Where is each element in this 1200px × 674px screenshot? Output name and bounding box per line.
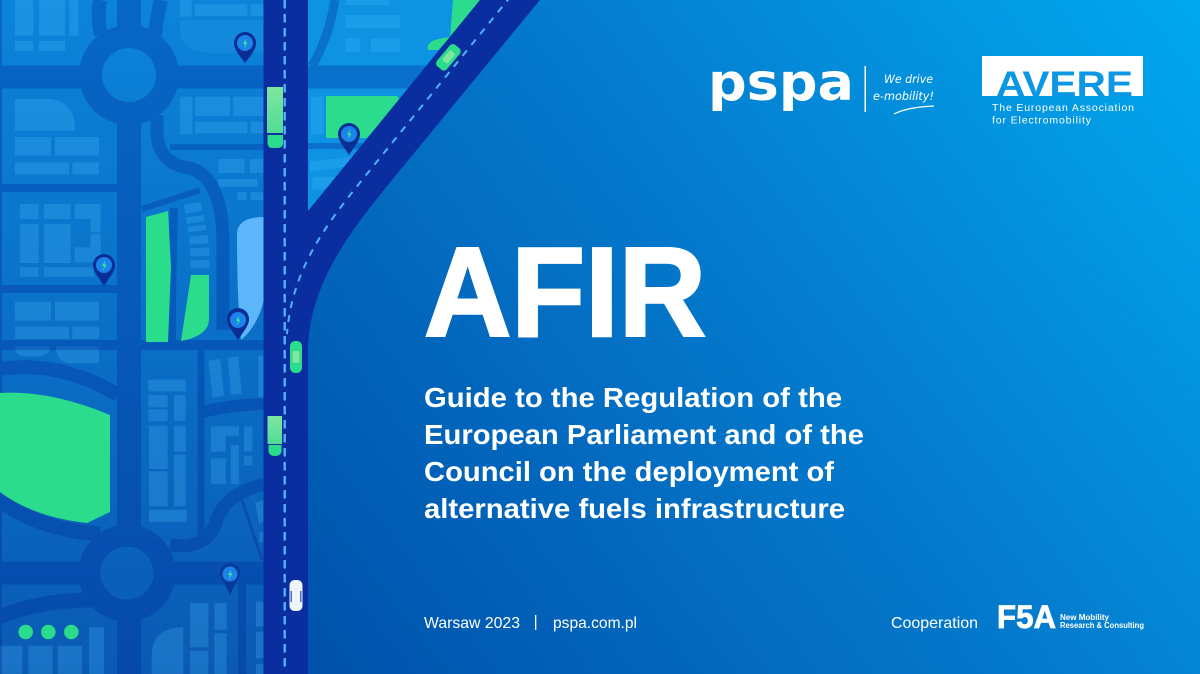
footer: cooperation: Cooperation	[891, 615, 978, 632]
logo: F5A: Research & Consulting	[1060, 621, 1144, 630]
logo: AVERE	[982, 56, 1143, 126]
subtitle: European Parliament and of the	[424, 419, 864, 450]
logo: F5A: New Mobility	[1060, 613, 1110, 622]
subtitle: Guide to the Regulation of the	[424, 382, 842, 413]
icon: charging pin 5	[220, 563, 240, 595]
footer: place and website	[424, 615, 637, 632]
subtitle	[424, 382, 864, 524]
icon: charging pin 2	[338, 123, 360, 155]
road: diagonal branch	[308, 0, 544, 345]
map buildings	[0, 0, 400, 674]
logo: PSPA	[708, 53, 934, 114]
icon: charging pin 1	[234, 32, 256, 63]
logo: PSPA: e-mobility!	[873, 89, 934, 103]
subtitle: Council on the deployment of	[424, 456, 835, 487]
logo: PSPA: pspa	[708, 53, 854, 113]
road: main vertical	[264, 0, 308, 674]
logo: AVERE: The European Association	[992, 102, 1134, 114]
panel: city map	[0, 0, 484, 674]
icon: white car	[290, 580, 302, 611]
roundabout centres	[100, 48, 156, 600]
icon: green car	[290, 341, 302, 373]
green parks	[0, 0, 480, 523]
icon: charging pin 3	[93, 254, 115, 286]
title: AFIR	[424, 221, 706, 363]
logo: PSPA: We drive	[884, 72, 933, 86]
icon: truck 1	[267, 87, 283, 148]
logo: AVERE: for Electromobility	[992, 114, 1092, 126]
subtitle: alternative fuels infrastructure	[424, 493, 845, 524]
footer: place and website: pspa.com.pl	[553, 615, 637, 632]
lane dashes: main	[284, 0, 286, 668]
logo: F5A: F5A	[997, 599, 1056, 635]
logo: AVERE: AVERE	[996, 65, 1133, 104]
icon: truck 2	[268, 416, 282, 456]
logo: F5A	[997, 599, 1144, 635]
three green dots	[18, 625, 79, 639]
lane dashes: branch	[287, 0, 511, 334]
water	[237, 217, 264, 340]
icon: charging pin 4	[227, 308, 249, 340]
upper right map roads	[308, 0, 426, 149]
icon: green car on branch	[434, 42, 462, 72]
map roads	[0, 0, 264, 674]
footer: place and website: Warsaw 2023	[424, 615, 520, 632]
panel: roads	[264, 0, 544, 674]
